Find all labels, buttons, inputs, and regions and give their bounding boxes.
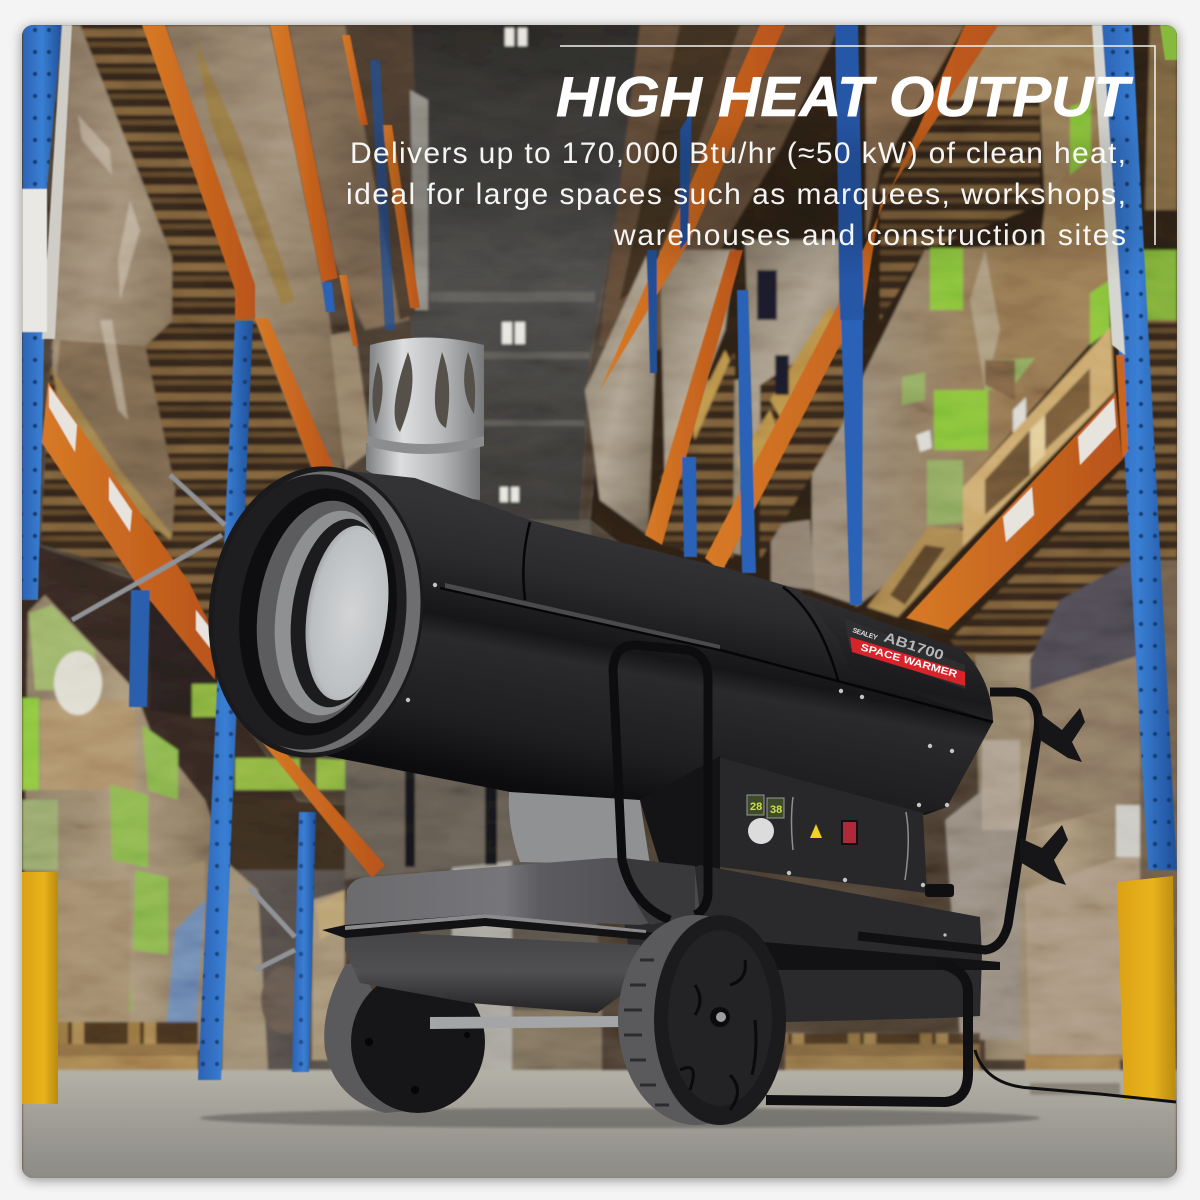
- text scrim: [340, 135, 1140, 255]
- red stripe: [850, 637, 965, 686]
- green shelf cartons: [192, 684, 368, 790]
- right rack: lower wrapped pallets: [974, 650, 1142, 1062]
- description text: Delivers up to 170,000 Btu/hr (≈50 kW) of clean heat,: [350, 137, 1126, 170]
- box labels: [916, 397, 1026, 452]
- large front wheel: [618, 915, 786, 1125]
- tank body right: [620, 865, 982, 1022]
- left rack: far wrapped bays: [165, 25, 345, 480]
- right rack: top shelves: [600, 25, 840, 350]
- orange beams left: [42, 25, 420, 878]
- space heater: [194, 338, 1176, 1125]
- left rack: lower dark bay: [22, 546, 298, 1068]
- control panel: 38: [770, 804, 782, 816]
- badge text: SEALEY: [851, 627, 879, 642]
- handle knob upper: [1038, 708, 1085, 762]
- ceiling lights: [500, 28, 527, 502]
- axle: [430, 1016, 622, 1029]
- chimney cowl: [368, 338, 484, 446]
- right rack: near wrapped cartons: [856, 240, 1116, 607]
- ceiling beams: [430, 292, 595, 426]
- right rack: pallet on beam: [963, 327, 1114, 547]
- blue uprights: [198, 321, 253, 1080]
- left rack: top left wrapped pallet: [50, 25, 174, 375]
- wheel hub: [710, 1007, 730, 1027]
- mid-left lower bay: [297, 801, 345, 869]
- tank lower left: [345, 930, 640, 1013]
- thermostat knob: [748, 818, 774, 844]
- tyre tread: [618, 915, 774, 1125]
- wrap highlights: [78, 115, 140, 420]
- wheel face: [351, 971, 485, 1113]
- motor housing: [509, 780, 650, 865]
- left rack: pallet slats bay: [40, 25, 345, 760]
- wheel face: [654, 915, 786, 1125]
- dark apron under drum: [640, 756, 720, 870]
- right rack: back dark: [590, 25, 1177, 660]
- chimney: [366, 338, 484, 500]
- yellow bollard right: [1117, 876, 1176, 1100]
- power switch: [842, 821, 857, 844]
- silver strip: [42, 25, 72, 339]
- green carton panels: [110, 725, 178, 955]
- tank upper left: [345, 858, 700, 930]
- front opening: [200, 465, 420, 759]
- green cartons: [930, 100, 1110, 450]
- pallet under wrap: [52, 368, 172, 540]
- main drum: [322, 470, 993, 813]
- drum seam highlight: [445, 583, 720, 649]
- rear small wheel: [324, 960, 485, 1113]
- pallet at lower shelf: [867, 527, 963, 617]
- control panel: [406, 583, 954, 937]
- control panel: 28: [750, 801, 762, 813]
- digital displays: [747, 795, 764, 815]
- left pallets bottom: [58, 1020, 200, 1072]
- orange beams right: [600, 25, 1122, 630]
- title: HIGH HEAT OUTPUT: [556, 65, 1133, 129]
- plastic bag: [54, 651, 102, 715]
- ceiling: [400, 25, 650, 520]
- left rack: wrapped cartons: [22, 595, 222, 1050]
- white rack sign: [22, 189, 47, 332]
- tread blocks: [624, 960, 669, 1105]
- rear frame and stand: [766, 963, 968, 1102]
- inner rings: [243, 492, 401, 732]
- heat exchanger disc: [295, 520, 399, 706]
- far aisle and door: [419, 519, 599, 1010]
- wrapped goods beside heater: [345, 755, 520, 880]
- warning triangle: [810, 824, 822, 838]
- rear shell: [760, 587, 993, 815]
- rating badge: [844, 618, 966, 689]
- floor shadow under heater: [200, 1108, 1040, 1128]
- pallet details on beams: [690, 305, 836, 490]
- description text: ideal for large spaces such as marquees, workshops,: [346, 178, 1126, 211]
- panel knob: [925, 884, 954, 897]
- front ring: [194, 456, 438, 768]
- cowl vents: [372, 352, 475, 432]
- panel bezels: [792, 797, 908, 880]
- power cable: [975, 1050, 1176, 1102]
- rear push handle: [858, 692, 1085, 950]
- yellow bollard left: [22, 872, 58, 1104]
- rack labels: [49, 386, 1116, 648]
- outer collar: [194, 456, 438, 768]
- drum seam lines: [440, 522, 993, 722]
- wheel tread: [324, 960, 420, 1113]
- metal collar band: [202, 461, 434, 763]
- floor: [22, 1070, 1177, 1180]
- tank bulge: [623, 858, 695, 925]
- front carry handle: [613, 645, 708, 920]
- rack braces: [72, 475, 295, 970]
- chimney pipe: [366, 443, 480, 500]
- description text: warehouses and construction sites: [613, 219, 1126, 252]
- right lower slat bay: [950, 459, 1177, 664]
- wheel spokes: [680, 960, 756, 1110]
- text frame corner: [560, 46, 1155, 245]
- screws: [406, 583, 954, 937]
- badge plate: [844, 618, 966, 689]
- description text: [346, 137, 1126, 252]
- handle knob lower: [1020, 825, 1068, 885]
- rating badge: SPACE WARMER: [859, 642, 959, 681]
- right rack: far wrapped bays: [585, 255, 655, 535]
- tank rim: [322, 914, 1000, 970]
- fuel tank: [322, 858, 1000, 1022]
- rating badge: AB1700: [882, 629, 946, 663]
